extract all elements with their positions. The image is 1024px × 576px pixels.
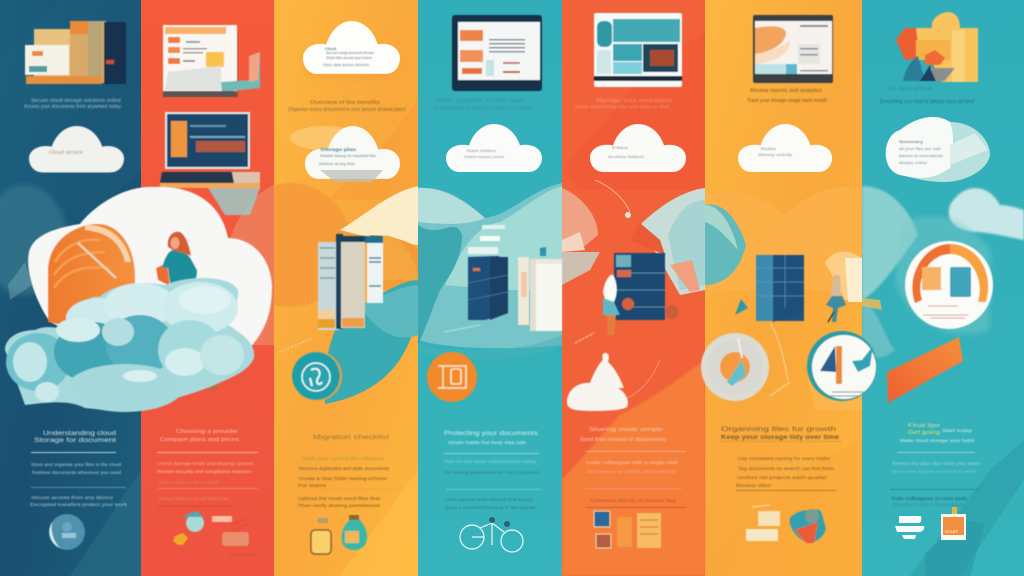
text block: column 2: Compare plans and prices (160, 437, 239, 443)
caption: column 1 top: Access your documents from anywhere today (24, 104, 121, 110)
figure: person, column 5 (575, 275, 620, 343)
text block: column 7: Start today (942, 428, 973, 433)
cloud: column 3 upper: Sync data across devices (323, 63, 369, 67)
icon: teal badge, column 3 (280, 338, 342, 401)
icon: server cabinet, column 5 (614, 253, 679, 320)
caption: column 7 top: Everything you need is always close at hand (880, 99, 974, 105)
icon: chart badge, column 6 (807, 331, 877, 401)
caption: column 5 top (575, 98, 672, 110)
text block: column 7: Move one project across this week (892, 469, 977, 474)
caption: column 6 top (747, 88, 827, 104)
text block: column 6: Tag documents so search can find them (738, 466, 834, 471)
text block: column 2: Review security and compliance features (157, 469, 252, 475)
icon: dashboard, column 5 (594, 13, 682, 87)
caption: column 4 top: Work together as one team (436, 98, 527, 104)
text block: column 1 (30, 430, 128, 508)
text block: column 5: Sharing made simple (589, 427, 663, 433)
caption: column 6 top: Review reports and analytics (750, 88, 823, 94)
text block: column 4: Keep a versioned backup in two places (445, 505, 536, 510)
cloud: column 6 (738, 124, 832, 172)
icon: folders, column 7 (896, 12, 978, 82)
cloud: column 5: Files (612, 145, 628, 150)
text block: column 6: Use consistent naming for every folder (738, 456, 831, 461)
text block: column 7: Final tips (908, 423, 941, 429)
cloud: column 3 upper: Store and manage documents with ease (326, 51, 374, 55)
text block: column 3: Then verify sharing permissions (298, 503, 381, 508)
icon: server rack, column 3 (318, 234, 418, 330)
text block: column 5: Invite colleagues with a single click (586, 460, 679, 465)
text block: column 6: Keep your storage tidy over time (721, 435, 840, 441)
panel: flowing cloud band, column 7 (862, 186, 1024, 358)
icon: server tower, column 6 (735, 255, 846, 396)
cloud: column 3 lower: Reliable backup for important files (320, 154, 376, 158)
text block: column 3: For teams (298, 483, 327, 488)
figure: person in teal (156, 232, 197, 300)
cloud: column 3 lower (290, 126, 400, 182)
panel: flowing cloud band, column 6 (705, 187, 862, 410)
icon: disc chart, column 6 (701, 333, 769, 401)
cloud: column 4: Shared access control (464, 155, 504, 159)
caption: column 4 top: Collaborate in real time with your team (434, 106, 534, 112)
text block: column 6: Organising files for growth (721, 427, 836, 433)
icon: globe, column 1 (49, 514, 85, 550)
cloud: column 7: Always online (899, 161, 927, 165)
text block: column 4: Set strong passwords for every account (444, 470, 540, 475)
text block: column 7: Get going (908, 430, 940, 436)
caption: column 6 top: Track your storage usage each month (747, 98, 827, 104)
text block: column 1: Understanding cloud (43, 430, 116, 437)
text block: column 7: Review the plan that suits your team (892, 461, 980, 466)
caption: column 1 top: Secure cloud storage solutions online (31, 98, 121, 104)
cloud: column 4 (446, 124, 542, 172)
icons: pills and notes, column 2 (173, 511, 256, 555)
text block: column 2 (157, 429, 258, 507)
text block: column 3: Create a clear folder naming scheme (299, 476, 388, 481)
icons: devices, column 3 (311, 515, 367, 554)
text block: column 4: Protecting your documents (444, 431, 538, 437)
panel: flowing cloud band, column 5 (562, 180, 705, 402)
text block: column 2: Move files in small batches (159, 496, 230, 501)
text block: column 3 (298, 435, 398, 508)
text block: column 1: Storage for document (34, 437, 116, 444)
panel: flowing cloud band, column 3 (274, 183, 418, 404)
text block: column 3: Upload the most used files first (298, 496, 381, 501)
text block: column 4: Limit access with shared link expiry (445, 497, 534, 502)
text block: column 5 (580, 427, 686, 508)
text block: column 5: Send links instead of attachments (580, 437, 666, 443)
cloud: column 7: Backed up automatically (899, 154, 943, 158)
cloud: column 4: Team folders (466, 148, 496, 153)
text block: column 7 (890, 423, 980, 507)
icon: bell shaped cloud, column 5 (567, 353, 628, 411)
text block: column 3: Audit your current file collection (302, 456, 384, 462)
text block: column 7: Check in after thirty days (892, 502, 965, 507)
text block: column 5: Comment directly on shared files (590, 498, 677, 503)
cloud: column 6: Stats (760, 147, 776, 151)
caption: column 3 top: Organise every document in one secure shared place (288, 107, 406, 113)
text block: column 6: Archive old projects each quarter (737, 475, 828, 480)
cloud: column 3 lower: Storage plan (320, 147, 356, 152)
cloud: column 3 upper (303, 21, 400, 79)
caption: column 7 top (880, 86, 974, 105)
icon: laptop, column 2 (160, 112, 260, 215)
panel: flowing cloud band, column 2 (230, 185, 274, 345)
cloud: column 5: Archive folders (608, 155, 644, 159)
icon: orange badge, column 4 (427, 352, 477, 402)
text block: column 3: Remove duplicates and stale documents (299, 466, 390, 471)
text block: column 7: Train colleagues on new tools (891, 496, 968, 501)
illustration: teal clouds (5, 278, 254, 412)
icon: server towers, column 4 (444, 225, 562, 332)
illustration: large hero cloud (5, 187, 272, 412)
text block: column 1: Store and organise your files in the cloud (31, 462, 121, 468)
caption: column 3 top (288, 100, 406, 113)
icons: stacked bars and tag, column 7 (895, 507, 985, 576)
cloud: column 7 (886, 117, 990, 182)
cloud: column 3 upper: Cloud (325, 46, 337, 51)
text block: column 1: Retrieve documents whenever you need (32, 470, 121, 476)
panel: flowing cloud band, column 4 (418, 183, 562, 359)
icon: tablet, column 4 (452, 15, 542, 91)
cloud: column 3 lower: Restore at any time (319, 162, 355, 166)
text block: column 4: Simple habits that keep data safe (448, 440, 526, 446)
caption: column 4 top (434, 98, 534, 112)
text block: column 5: Set viewer or editor permissions (586, 469, 677, 474)
text block: column 2: Choosing a provider (176, 429, 238, 435)
text block: column 6: Review often (736, 483, 772, 488)
icons: notes and pie, column 6 (746, 505, 826, 543)
caption: column 1 top (24, 98, 121, 110)
cloud: column 6: Weekly activity (758, 153, 792, 157)
icon: report tablet, column 6 (753, 15, 833, 83)
icon: folder stack, column 1 (25, 21, 126, 84)
icons: nodes, column 4 (460, 517, 523, 552)
caption: column 7 top: In one place (889, 86, 933, 92)
caption: column 3 top: Overview of the benefits (310, 100, 380, 106)
text block: column 6 (720, 427, 842, 491)
icon: orange dome (48, 224, 135, 325)
text block: column 3: Migration checklist (313, 435, 389, 441)
cloud: column 7: Summary (899, 139, 924, 144)
text block: column 2: Start with a free trial (158, 480, 218, 485)
caption: column 5 top: Manage your workspace (596, 98, 672, 104)
icon: orange ribbon, column 7 (887, 337, 963, 403)
text block: column 7: Make cloud storage your habit (900, 438, 975, 443)
cloud: column 5 (590, 124, 686, 172)
text block: column 1: Secure access from any device (31, 495, 113, 501)
illustration: tree trunk (209, 376, 218, 390)
cloud: column 7: All your files are safe (899, 147, 941, 151)
text block: column 4: Turn on two factor authentication today (444, 459, 537, 464)
cloud: column 1: Cloud service (49, 150, 83, 156)
icons: document tiles, column 5 (594, 511, 661, 548)
icon: ring badge, column 7 (905, 241, 993, 329)
cloud: column 3 upper: Share files across your teams (326, 56, 372, 60)
cloud: column 1 (29, 126, 124, 172)
icons: stacked bars and tag, column 7: START (945, 529, 959, 534)
text block: column 2: Check storage limits and sharing options (157, 461, 254, 467)
text block: column 1: Encrypted transfers protect your work (30, 502, 128, 508)
panel: flowing cloud band, column 1 (0, 185, 67, 300)
caption: column 5 top: Keep everything tidy and easy to find (575, 104, 669, 110)
text block: column 4 (444, 431, 541, 510)
icon: document card, column 2 (163, 25, 260, 97)
